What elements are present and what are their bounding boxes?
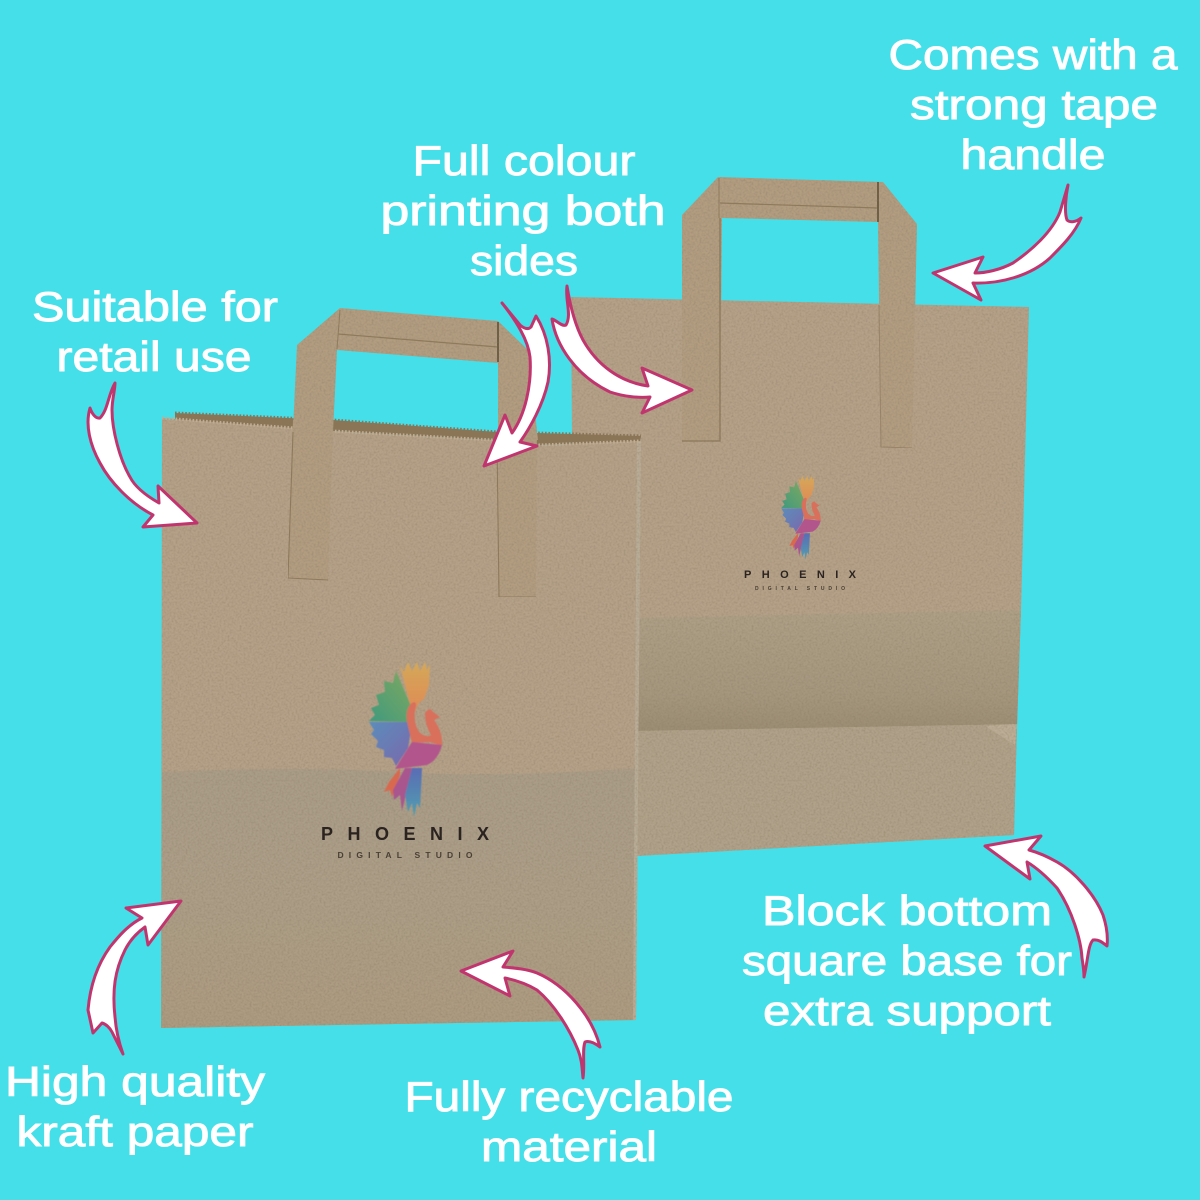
label: kraft paper: High quality (5, 1058, 265, 1105)
label: strong tape handle: strong tape (910, 81, 1158, 128)
label: block bottom: square base for (742, 937, 1072, 984)
rear logo bird (781, 476, 821, 560)
label: recyclable material: material (481, 1123, 657, 1170)
arrow to front bag (484, 303, 550, 466)
rear bag handle (682, 177, 917, 448)
callout: kraft paper (5, 901, 265, 1155)
front bag logo (321, 662, 489, 860)
front paper bag (161, 308, 641, 1028)
front logo bird (369, 662, 442, 817)
arrow to rear bag base (985, 836, 1107, 977)
rear paper bag (571, 177, 1029, 856)
front bag serrated front edge (162, 418, 640, 445)
arrow to front bag base (461, 951, 600, 1078)
label: strong tape handle: Comes with a (888, 31, 1178, 78)
arrow to front bag corner (88, 901, 181, 1054)
label: recyclable material (404, 1073, 734, 1170)
label: kraft paper (5, 1058, 265, 1155)
label: full colour printing: sides (470, 237, 578, 284)
rear logo tagline: DIGITAL STUDIO (755, 586, 845, 592)
callout: retail use (32, 283, 278, 527)
label: block bottom: Block bottom (762, 887, 1052, 934)
arrow to rear handle (933, 185, 1081, 300)
label: block bottom: extra support (763, 987, 1051, 1034)
front bag handle (288, 308, 538, 597)
label: full colour printing: printing both (380, 187, 666, 234)
arrow to rear bag (552, 286, 692, 413)
label: kraft paper: kraft paper (16, 1108, 254, 1155)
label: recyclable material: Fully recyclable (404, 1073, 734, 1120)
rear bag body (571, 297, 1029, 856)
rear logo wordmark: PHOENIX (744, 569, 857, 581)
label: strong tape handle (888, 31, 1178, 178)
label: block bottom (742, 887, 1072, 1034)
front bag serrated back edge (175, 413, 641, 436)
label: retail use (32, 283, 278, 380)
callout: recyclable material (404, 951, 734, 1170)
callout: full colour printing (380, 137, 692, 466)
rear bag logo (744, 476, 857, 592)
label: full colour printing (380, 137, 666, 284)
label: strong tape handle: handle (960, 131, 1106, 178)
front logo wordmark: PHOENIX (321, 824, 489, 844)
front logo tagline: DIGITAL STUDIO (338, 850, 473, 860)
arrow to front bag side (88, 383, 197, 527)
callout: block bottom (742, 836, 1107, 1034)
front bag body (161, 418, 641, 1028)
label: retail use: Suitable for (32, 283, 278, 330)
front bag back panel (175, 413, 641, 445)
label: retail use: retail use (56, 333, 252, 380)
label: full colour printing: Full colour (412, 137, 636, 184)
callout: strong tape handle (888, 31, 1178, 300)
